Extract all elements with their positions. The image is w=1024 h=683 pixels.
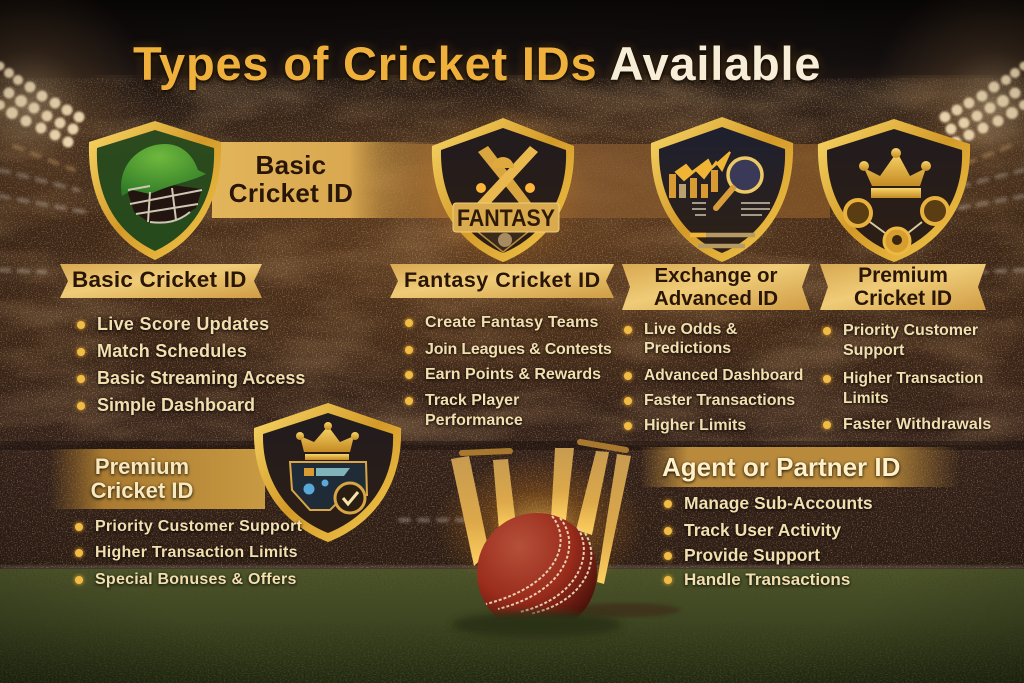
fantasy label: FANTASY xyxy=(457,205,555,232)
banner: basic xyxy=(212,142,432,218)
heading: exchange xyxy=(654,264,778,310)
list: exchange xyxy=(621,321,804,436)
text: Track Player xyxy=(425,392,519,409)
text: Priority Customer Support xyxy=(95,518,302,535)
heading: exchange: Exchange or xyxy=(654,264,778,287)
heading: basic banner text: Cricket ID xyxy=(229,178,353,208)
connecting band between shields xyxy=(393,144,830,218)
text: Join Leagues & Contests xyxy=(425,341,612,358)
list: premium lower xyxy=(72,518,304,590)
list: premium xyxy=(820,322,992,433)
banner: agent xyxy=(642,447,956,487)
ribbon: basic xyxy=(60,264,262,298)
heading: basic banner text xyxy=(229,150,353,208)
text: Track User Activity xyxy=(684,520,841,540)
heading: premium: Premium xyxy=(858,264,948,287)
text: Match Schedules xyxy=(97,341,247,361)
text: Higher Transaction Limits xyxy=(95,544,298,561)
illustration: wickets and ball xyxy=(444,439,636,639)
text: Earn Points & Rewards xyxy=(425,366,601,383)
heading: premium lower xyxy=(89,454,195,503)
icon: premium crown shield xyxy=(818,119,970,262)
heading: basic banner text: Basic xyxy=(256,150,326,180)
heading: premium: Cricket ID xyxy=(854,287,952,310)
text: Support xyxy=(843,342,904,359)
text: Create Fantasy Teams xyxy=(425,314,599,331)
ribbon: fantasy xyxy=(390,264,614,298)
icon: helmet shield xyxy=(88,121,222,260)
crown xyxy=(859,148,931,198)
icon: lower premium shield xyxy=(254,403,402,542)
heading: agent: Agent or Partner ID xyxy=(662,452,900,482)
text: Basic Streaming Access xyxy=(97,368,305,388)
heading: premium lower: Cricket ID xyxy=(91,478,193,503)
text: Handle Transactions xyxy=(684,570,850,589)
text: Predictions xyxy=(644,340,731,357)
text: Simple Dashboard xyxy=(97,395,255,415)
list: basic xyxy=(74,314,306,418)
heading: basic list: Basic Cricket ID xyxy=(72,267,247,292)
heading: premium lower: Premium xyxy=(95,454,189,479)
list: agent xyxy=(661,493,873,589)
text: Live Score Updates xyxy=(97,314,269,334)
text: Faster Transactions xyxy=(644,392,795,409)
heading: premium xyxy=(854,264,952,310)
text: Higher Transaction xyxy=(843,370,983,387)
ribbon: premium xyxy=(820,264,986,310)
ribbon: exchange xyxy=(622,264,810,310)
text: Live Odds & xyxy=(644,321,737,338)
text: Performance xyxy=(425,412,523,429)
banner: premium lower xyxy=(54,449,265,509)
text: Faster Withdrawals xyxy=(843,416,991,433)
heading: exchange: Advanced ID xyxy=(654,287,778,310)
helmet xyxy=(121,144,206,223)
text: Provide Support xyxy=(684,545,820,565)
icon: fantasy shield xyxy=(432,117,574,262)
text: Limits xyxy=(843,390,889,407)
text: Special Bonuses & Offers xyxy=(95,571,297,588)
icon: exchange shield xyxy=(650,117,794,262)
title: Types of Cricket IDs Available xyxy=(133,37,821,90)
text: Advanced Dashboard xyxy=(644,367,803,384)
text: Priority Customer xyxy=(843,322,978,339)
heading: fantasy: Fantasy Cricket ID xyxy=(404,268,601,292)
list: fantasy xyxy=(402,314,613,429)
text: Manage Sub-Accounts xyxy=(684,493,873,513)
text: Higher Limits xyxy=(644,417,746,434)
